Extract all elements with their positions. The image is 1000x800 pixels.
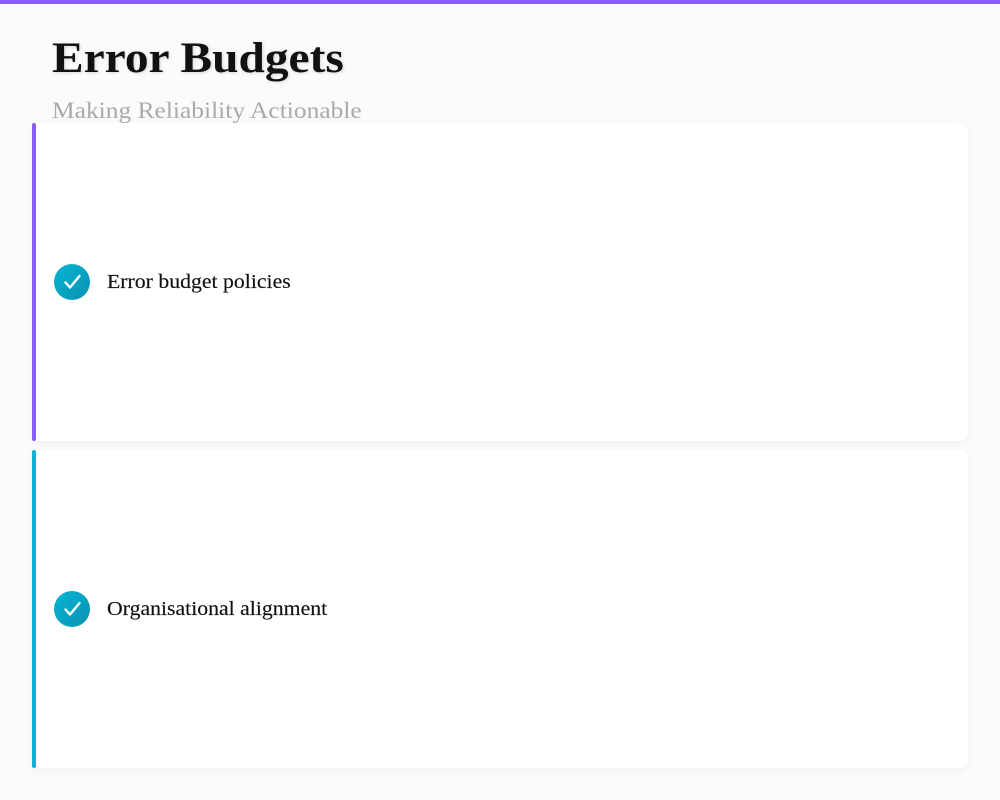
panel: organisational alignment <box>32 450 968 768</box>
panel: error budget policies <box>32 123 968 441</box>
item label: Organisational alignment <box>107 598 327 620</box>
icon: check mark <box>54 264 90 300</box>
icon: check mark <box>54 591 90 627</box>
subtitle: Making Reliability Actionable <box>52 98 362 123</box>
panel accent bar: cyan <box>32 450 36 768</box>
panel accent bar: purple <box>32 123 36 441</box>
item label: Error budget policies <box>107 271 291 293</box>
top accent bar <box>0 0 1000 4</box>
title: Error Budgets <box>52 35 344 82</box>
